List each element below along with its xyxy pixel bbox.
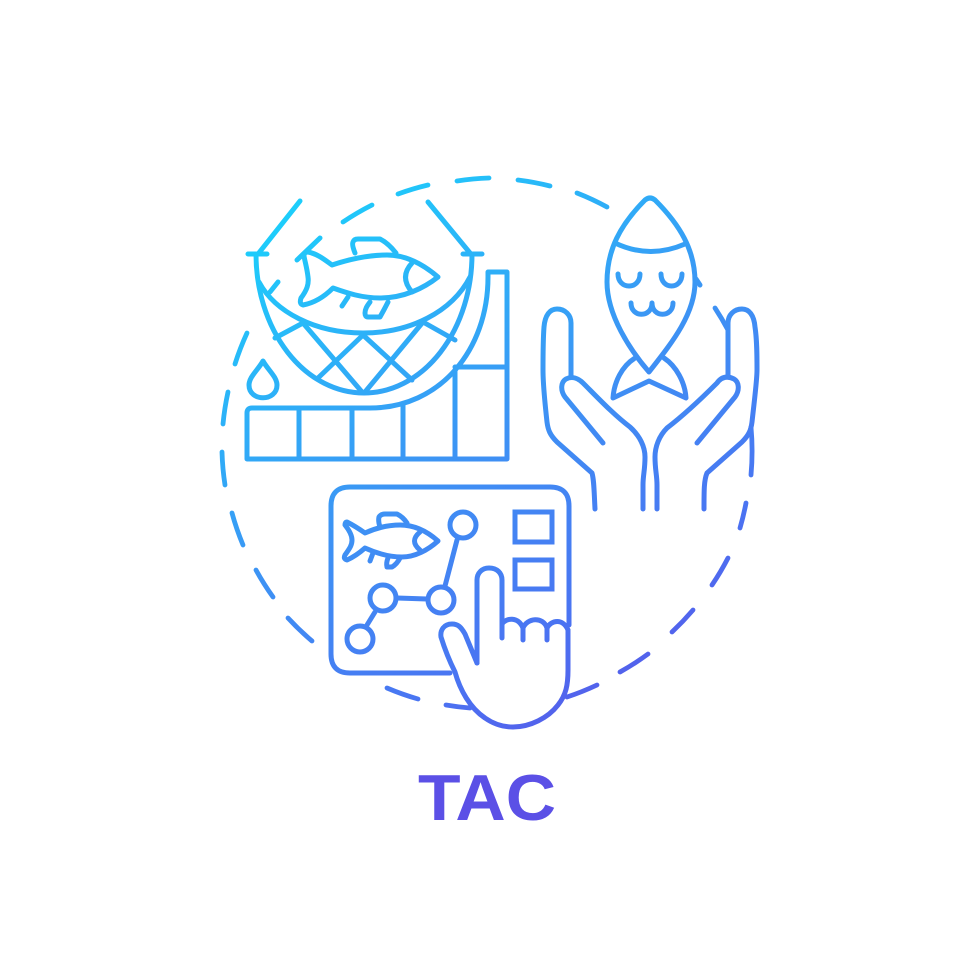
network graph <box>347 512 476 652</box>
right hand <box>655 309 757 509</box>
vertical fish <box>607 198 700 398</box>
icon: fish in net over rising bar chart <box>247 201 507 459</box>
icon: water drop <box>249 361 277 398</box>
small fish <box>344 514 438 567</box>
bar chart <box>247 272 507 459</box>
left hand <box>543 309 645 509</box>
icon: touch panel with data graph <box>331 487 569 727</box>
panel frame <box>331 487 569 673</box>
buttons <box>515 512 552 589</box>
pointing hand <box>441 568 568 727</box>
fish in net <box>297 238 438 317</box>
dashed circle <box>222 178 752 708</box>
fishing net <box>248 201 482 393</box>
icon: fish held in hands <box>543 198 757 509</box>
title: TAC <box>418 761 556 834</box>
